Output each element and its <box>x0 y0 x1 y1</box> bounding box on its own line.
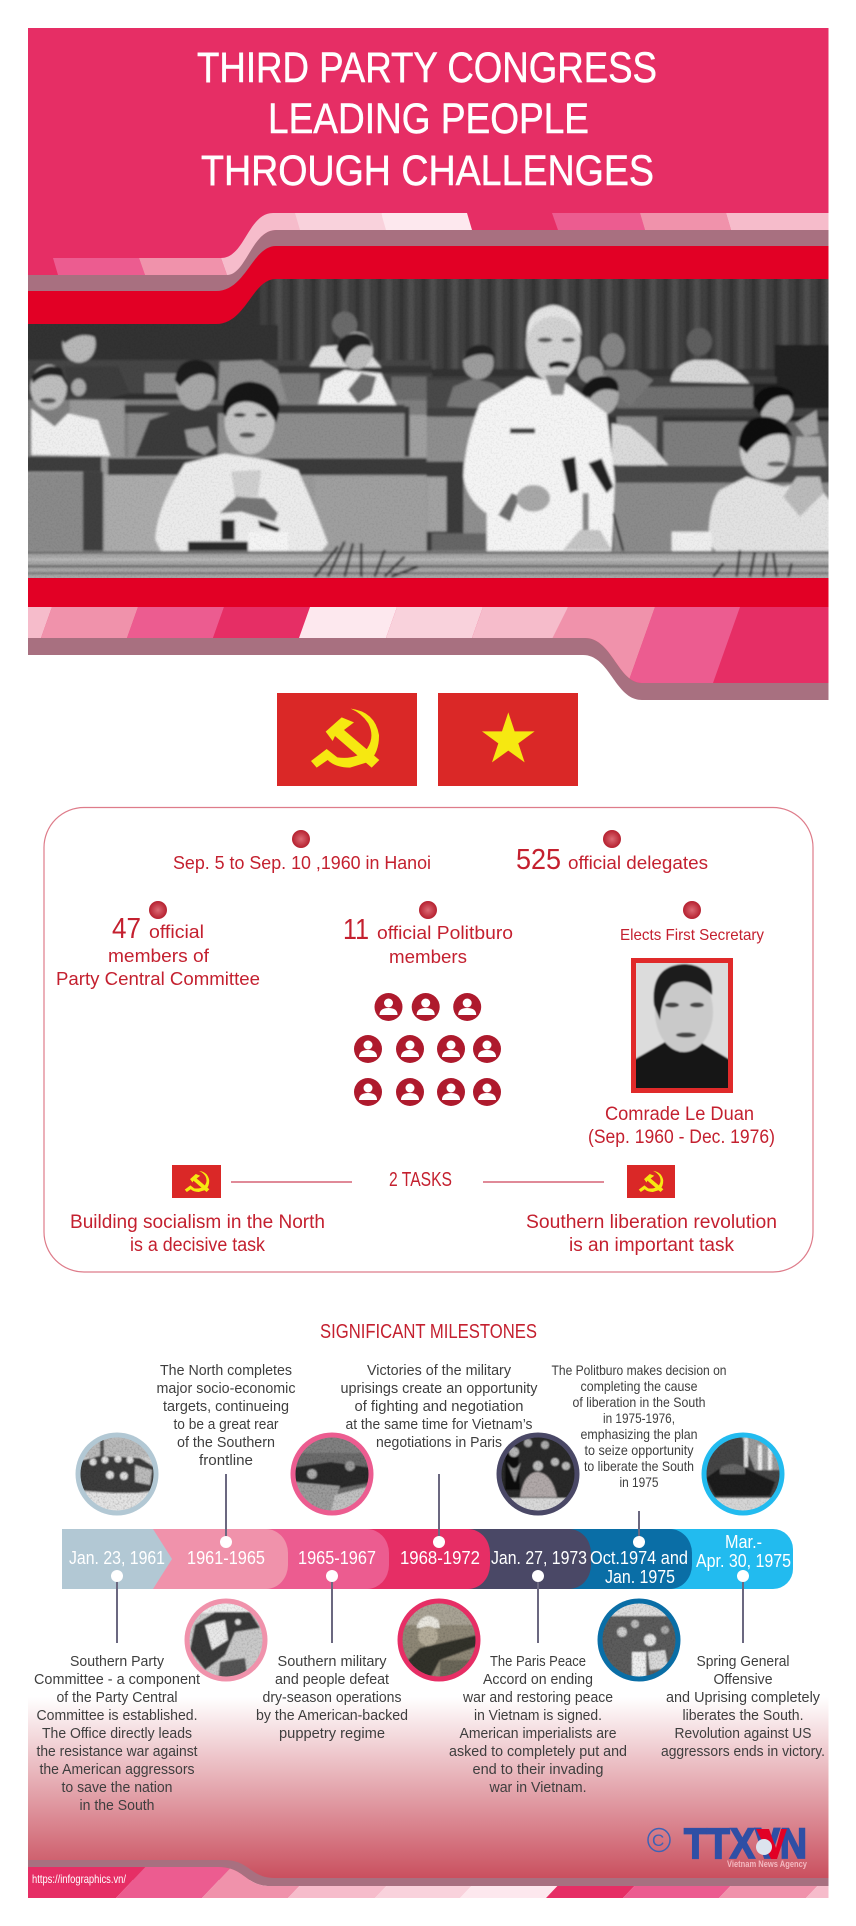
milestone text: Jan. 23, 1961: The Office directly leads <box>42 1725 192 1742</box>
timeline labels <box>69 1532 791 1587</box>
fact: 11 Politburo members: official Politburo <box>377 923 513 943</box>
milestone text: 1965-1967: dry-season operations <box>262 1689 402 1706</box>
milestone text: Oct. 1974 and Jan. 1975 <box>552 1362 726 1490</box>
logo: TTXVN Vietnam News Agency: TTXVN <box>684 1820 807 1868</box>
milestone text: 1961-1965: The North completes <box>160 1362 292 1379</box>
milestone text: 1968-1972: of fighting and negotiation <box>354 1398 524 1415</box>
timeline labels: Apr. 30, 1975 <box>696 1551 791 1571</box>
timeline labels: 1968-1972 <box>400 1548 480 1568</box>
front man <box>155 453 328 552</box>
logo: TTXVN Vietnam News Agency: C <box>652 1831 664 1850</box>
milestone text: Jan. 23, 1961 <box>34 1653 201 1814</box>
milestone text: Jan. 27, 1973: in Vietnam is signed. <box>474 1707 602 1724</box>
milestone text: 1961-1965: of the Southern <box>177 1434 275 1451</box>
milestone text: Jan. 27, 1973: end to their invading <box>472 1761 604 1778</box>
milestone text: Oct. 1974 and Jan. 1975: to liberate the South <box>584 1458 694 1474</box>
title: LEADING PEOPLE <box>268 95 589 143</box>
timeline labels: Jan. 23, 1961 <box>69 1548 165 1568</box>
milestone text: 1961-1965 <box>156 1362 296 1469</box>
timeline labels: 1961-1965 <box>187 1548 265 1568</box>
footer pink strips <box>28 1867 828 1898</box>
milestone text: 1968-1972: uprisings create an opportunity <box>340 1380 538 1397</box>
President Ho Chi Minh <box>463 377 615 552</box>
photo circle: Paris Peace Accord signing <box>496 1432 580 1516</box>
timeline labels: Oct.1974 and <box>590 1548 688 1568</box>
milestone text: 1965-1967: by the American-backed <box>256 1707 408 1724</box>
microphones <box>562 457 578 493</box>
milestone text: Oct. 1974 and Jan. 1975: in 1975-1976, <box>603 1410 675 1426</box>
milestone text: 1968-1972: at the same time for Vietnam’s <box>346 1416 532 1433</box>
photo circle: tank <box>701 1432 785 1516</box>
task 1 <box>70 1165 325 1256</box>
header ribbon: pink strips <box>53 213 829 275</box>
portrait: Comrade Le Duan <box>630 958 734 1093</box>
timeline labels: 1965-1967 <box>298 1548 376 1568</box>
photo circle: crowd <box>597 1598 681 1682</box>
milestone text: Jan. 23, 1961: Southern Party <box>70 1653 164 1670</box>
footer grey ribbon <box>28 1860 829 1886</box>
title: THROUGH CHALLENGES <box>201 147 654 195</box>
milestone text: Mar.-Apr. 30, 1975: liberates the South. <box>682 1707 804 1724</box>
milestone text: Oct. 1974 and Jan. 1975: of liberation in the South <box>572 1394 706 1410</box>
photo detail left half <box>21 312 432 581</box>
milestone text: Jan. 23, 1961: of the Party Central <box>56 1689 178 1706</box>
milestone text: Jan. 27, 1973 <box>449 1653 627 1796</box>
photo circle: Southern Party Committee group <box>75 1432 159 1516</box>
milestone text: 1961-1965: frontline <box>199 1452 253 1469</box>
milestone text: 1965-1967: Southern military <box>278 1653 387 1670</box>
photo circle: soldiers marching <box>184 1598 268 1682</box>
task 1: Building socialism in the North <box>70 1212 325 1233</box>
milestone text: Jan. 27, 1973: war in Vietnam. <box>489 1779 586 1796</box>
milestone text: Mar.-Apr. 30, 1975: aggressors ends in victory. <box>661 1743 825 1760</box>
heading: 2 tasks: 2 TASKS <box>389 1169 452 1191</box>
milestone text: Jan. 23, 1961: Committee is established. <box>36 1707 198 1724</box>
desk <box>21 551 432 581</box>
logo: TTXVN Vietnam News Agency: Vietnam News Agency <box>727 1859 807 1869</box>
milestone text: Jan. 27, 1973: war and restoring peace <box>462 1689 613 1706</box>
fact: 11 Politburo members: 11 <box>343 914 369 946</box>
lower grey ribbon <box>28 607 829 700</box>
fact: date and place: Sep. 5 to Sep. 10 ,1960 in Hanoi <box>173 853 431 873</box>
photo: Third Congress presidium <box>20 270 840 585</box>
fact: 47 Central Committee members: Party Central Committee <box>56 969 260 989</box>
title: THIRD PARTY CONGRESS <box>197 44 657 92</box>
lower pink strips <box>28 607 829 687</box>
milestone text: Jan. 27, 1973: American imperialists are <box>460 1725 616 1742</box>
task 2: is an important task <box>569 1235 734 1256</box>
milestone text: Jan. 23, 1961: to save the nation <box>62 1779 172 1796</box>
milestone text: Jan. 23, 1961: in the South <box>80 1797 154 1814</box>
people left and officer <box>135 408 218 457</box>
fact: 525 official delegates: 525 <box>516 844 561 876</box>
milestone text: 1968-1972: negotiations in Paris <box>376 1434 502 1451</box>
officer beside Ho <box>612 423 668 465</box>
back audience <box>671 360 749 383</box>
milestone text: Mar.-Apr. 30, 1975: and Uprising completely <box>666 1689 820 1706</box>
title <box>197 44 657 195</box>
fact: 11 Politburo members: members <box>389 947 467 967</box>
milestone text: 1968-1972: Victories of the military <box>367 1362 511 1379</box>
milestone text: Oct. 1974 and Jan. 1975: completing the cause <box>580 1378 698 1394</box>
milestone text: Oct. 1974 and Jan. 1975: The Politburo makes decision on <box>552 1362 726 1378</box>
task 2: Southern liberation revolution <box>526 1212 777 1233</box>
fact: date and place <box>173 830 431 873</box>
milestone text: Mar.-Apr. 30, 1975: Offensive <box>714 1671 772 1688</box>
heading: significant milestones: SIGNIFICANT MILESTONES <box>320 1321 537 1343</box>
fact: 47 Central Committee members <box>56 901 260 989</box>
milestone text: 1965-1967: and people defeat <box>275 1671 390 1688</box>
footer gradient background <box>28 1697 829 1880</box>
milestone text: Oct. 1974 and Jan. 1975: emphasizing the plan <box>580 1426 698 1442</box>
icon: yellow star <box>482 712 535 762</box>
fact: elects First Secretary <box>620 901 764 944</box>
milestone text: 1968-1972 <box>340 1362 538 1451</box>
milestone text: Jan. 23, 1961: the resistance war against <box>36 1743 198 1760</box>
milestone text: Jan. 27, 1973: asked to completely put and <box>449 1743 627 1760</box>
header ribbon: grey band <box>28 28 829 291</box>
caption: Comrade Le Duan: (Sep. 1960 - Dec. 1976) <box>588 1127 775 1148</box>
caption: Comrade Le Duan <box>588 1104 775 1148</box>
milestone text: Jan. 23, 1961: the American aggressors <box>40 1761 194 1778</box>
photo detail right half <box>427 305 835 581</box>
header panel <box>28 28 829 275</box>
flag: Vietnam national flag <box>438 693 578 786</box>
task 2 <box>526 1165 777 1256</box>
milestone text: 1965-1967: puppetry regime <box>279 1725 385 1742</box>
lower red band <box>28 578 829 607</box>
caption: Comrade Le Duan: Comrade Le Duan <box>605 1104 754 1125</box>
fact: 525 official delegates <box>516 830 708 876</box>
right figures <box>793 437 827 467</box>
timeline labels: Jan. 27, 1973 <box>491 1548 587 1568</box>
emblem: hammer and sickle <box>311 709 379 768</box>
timeline bar <box>62 1529 793 1589</box>
logo: TTXVN Vietnam News Agency <box>648 1820 807 1869</box>
milestone text: 1965-1967 <box>256 1653 408 1742</box>
panel: congress facts <box>44 808 813 1272</box>
photo circle: battlefield <box>290 1432 374 1516</box>
milestone text: 1961-1965: targets, continueing <box>163 1398 289 1415</box>
task 1: is a decisive task <box>130 1235 265 1256</box>
milestone text: Mar.-Apr. 30, 1975: Spring General <box>696 1653 790 1670</box>
photo circle: soldier with helmet <box>397 1598 481 1682</box>
timeline labels: Mar.- <box>725 1532 762 1552</box>
people back row <box>310 343 381 367</box>
milestone text: Jan. 23, 1961: Committee - a component <box>34 1671 201 1688</box>
milestone text: Mar.-Apr. 30, 1975 <box>661 1653 825 1760</box>
milestone text: Oct. 1974 and Jan. 1975: to seize opportunity <box>584 1442 694 1458</box>
fact: 47 Central Committee members: members of <box>108 946 210 966</box>
milestone text: Jan. 27, 1973: The Paris Peace <box>490 1653 586 1670</box>
icons: eleven Politburo members <box>354 993 501 1106</box>
milestone text: 1961-1965: to be a great rear <box>174 1416 278 1433</box>
milestone text: Jan. 27, 1973: Accord on ending <box>483 1671 593 1688</box>
connector lines and dots <box>111 1474 749 1643</box>
header ribbon: red band <box>28 28 829 324</box>
milestone text: Mar.-Apr. 30, 1975: Revolution against US <box>674 1725 812 1742</box>
source URL: https://infographics.vn/ <box>32 1872 127 1886</box>
fact: 47 Central Committee members: 47 <box>112 913 141 945</box>
flag: hammer and sickle <box>277 693 417 786</box>
desk <box>427 551 835 581</box>
timeline labels: Jan. 1975 <box>605 1567 675 1587</box>
fact: 47 Central Committee members: official <box>149 922 204 942</box>
fact: 11 Politburo members <box>343 901 513 967</box>
fact: elects First Secretary: Elects First Secretary <box>620 927 764 944</box>
milestone text: 1961-1965: major socio-economic <box>156 1380 296 1397</box>
fact: 525 official delegates: official delegates <box>568 853 708 873</box>
milestone text: Oct. 1974 and Jan. 1975: in 1975 <box>620 1474 659 1490</box>
